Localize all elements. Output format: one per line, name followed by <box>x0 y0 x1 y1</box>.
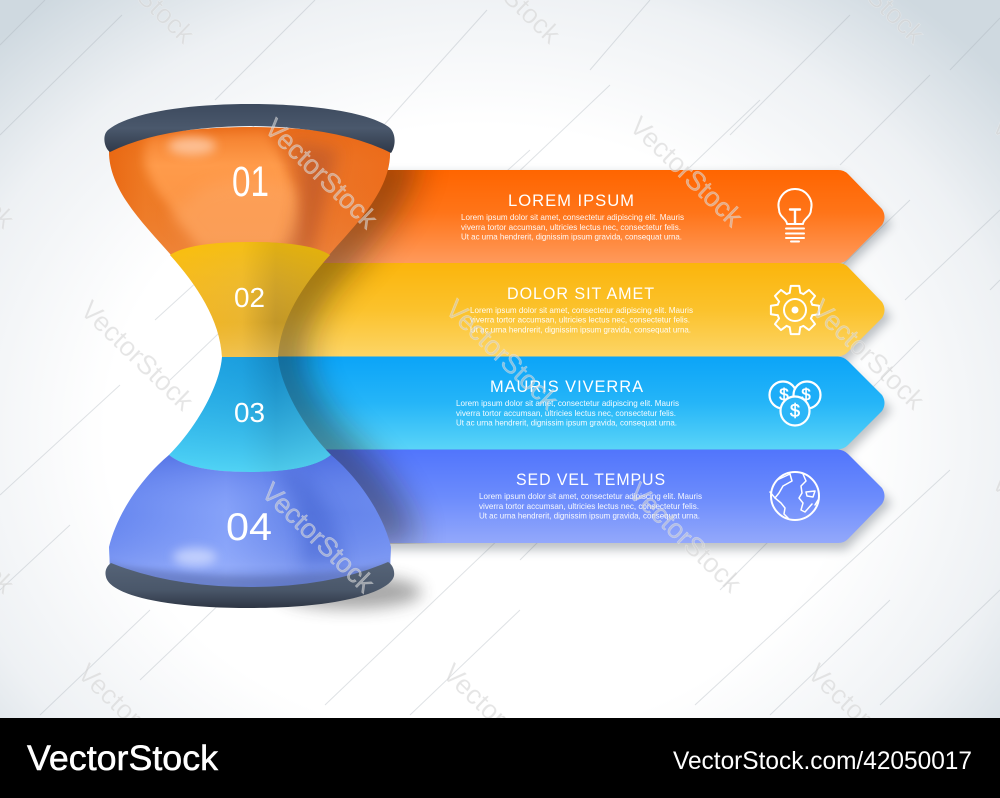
body text 1 <box>461 212 684 242</box>
watermarks: VectorStock <box>72 658 197 780</box>
icon: light bulb <box>778 189 812 242</box>
watermarks: VectorStock <box>802 658 927 780</box>
bottom rim <box>105 562 394 608</box>
watermarks: VectorStock <box>437 658 562 780</box>
watermarks: VectorStock <box>440 294 565 416</box>
body text 4: viverra tortor accumsan, ultricies lectus nec, consectetur felis. <box>479 501 699 511</box>
body text 3: Ut ac urna hendrerit, dignissim ipsum gravida, consequat urna. <box>456 418 677 428</box>
body text 2: Lorem ipsum dolor sit amet, consectetur adipiscing elit. Mauris <box>470 305 693 315</box>
body text 3: viverra tortor accumsan, ultricies lectus nec, consectetur felis. <box>456 408 676 418</box>
number 02: 02 <box>234 282 265 313</box>
top rim <box>104 104 395 153</box>
body text 2 <box>470 305 693 334</box>
body text 3 <box>456 398 679 428</box>
hourglass section 04 blue <box>109 455 391 587</box>
icon: coins: $ <box>801 385 811 404</box>
body text 1: viverra tortor accumsan, ultricies lectus nec, consectetur felis. <box>461 222 681 232</box>
footer logo: VectorStock <box>27 739 219 778</box>
hourglass section 03 cyan <box>169 357 331 472</box>
body text 2: Ut ac urna hendrerit, dignissim ipsum gravida, consequat urna. <box>470 324 691 334</box>
body text 1: Lorem ipsum dolor sit amet, consectetur adipiscing elit. Mauris <box>461 212 684 222</box>
panel: ribbon 4 periwinkle <box>260 450 884 543</box>
heading: sed vel tempus: SED VEL TEMPUS <box>516 470 666 489</box>
icon: globe <box>770 472 819 520</box>
base shadow <box>278 575 422 609</box>
icon: coins: $ <box>779 385 789 404</box>
hourglass section 01 orange <box>108 127 390 254</box>
body text 4 <box>479 491 702 520</box>
ribbon shadows <box>380 174 892 550</box>
number 03: 03 <box>234 397 265 428</box>
watermarks: VectorStock <box>256 477 381 599</box>
text block 4 <box>479 470 702 520</box>
footer bar <box>0 718 1000 798</box>
heading: lorem ipsum: LOREM IPSUM <box>508 191 635 210</box>
watermarks: VectorStock <box>623 477 748 599</box>
icon: coins: $ <box>790 401 800 421</box>
panel: ribbon 1 orange <box>260 170 884 264</box>
number 04: 04 <box>226 506 272 549</box>
hourglass <box>100 104 400 608</box>
watermarks: VectorStock <box>806 294 931 416</box>
icon: coins <box>770 382 820 426</box>
watermarks: VectorStock <box>259 113 384 235</box>
watermarks: VectorStock <box>624 111 749 233</box>
icon: gear <box>771 286 819 334</box>
hourglass section 02 yellow <box>170 242 330 357</box>
body text 3: Lorem ipsum dolor sit amet, consectetur adipiscing elit. Mauris <box>456 398 679 408</box>
text block 1 <box>461 191 684 242</box>
panel: ribbon 3 blue <box>260 356 884 450</box>
heading: mauris viverra: MAURIS VIVERRA <box>490 377 644 396</box>
text block 3 <box>456 377 679 428</box>
body text 4: Ut ac urna hendrerit, dignissim ipsum gravida, consequat urna. <box>479 510 700 520</box>
hourglass shadow on ribbons <box>280 150 395 545</box>
footer url: VectorStock.com/42050017 <box>673 747 972 775</box>
body text 4: Lorem ipsum dolor sit amet, consectetur adipiscing elit. Mauris <box>479 491 702 501</box>
text block 2 <box>470 284 693 334</box>
watermarks: VectorStock <box>75 295 200 417</box>
body text 1: Ut ac urna hendrerit, dignissim ipsum gravida, consequat urna. <box>461 232 682 242</box>
panel: ribbon 2 yellow <box>260 263 884 356</box>
number 01: 01 <box>232 158 269 206</box>
body text 2: viverra tortor accumsan, ultricies lectus nec, consectetur felis. <box>470 314 690 324</box>
heading: dolor sit amet: DOLOR SIT AMET <box>507 284 655 303</box>
